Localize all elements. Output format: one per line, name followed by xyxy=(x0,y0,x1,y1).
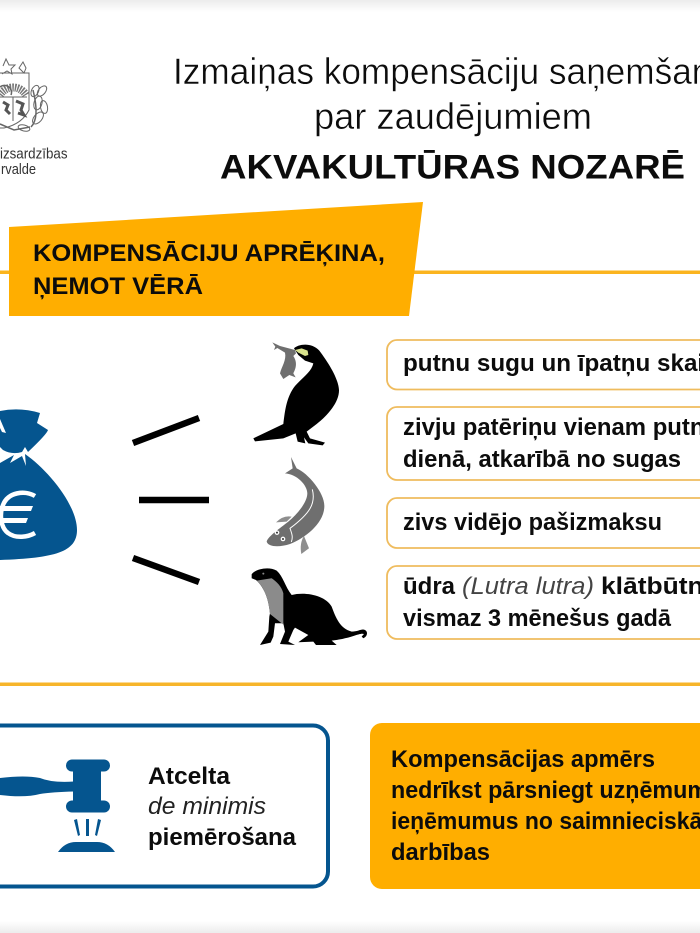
section rule: upper xyxy=(0,270,700,274)
panel: de minimis xyxy=(0,726,328,886)
panel: de minimis: piemērošana xyxy=(148,824,297,851)
list item: bird count xyxy=(387,340,700,390)
title: AKVAKULTŪRAS NOZARĒ xyxy=(220,148,685,186)
icon: money bag with euro sign xyxy=(0,409,77,560)
panel: de minimis: Atcelta xyxy=(148,763,231,790)
logo: coat of arms with organisation name xyxy=(0,59,68,178)
panel: compensation limit callout: Kompensācijas apmērs xyxy=(391,746,655,773)
list item: average fish cost: zivs vidējo pašizmaksu xyxy=(403,509,662,536)
list item: otter presence: ūdra xyxy=(403,573,455,600)
connector lines xyxy=(133,418,209,582)
list item: otter presence: vismaz 3 mēnešus gadā xyxy=(403,605,671,632)
title xyxy=(173,51,700,186)
list item: otter presence xyxy=(387,566,700,639)
section banner xyxy=(9,202,423,316)
icon: gavel xyxy=(0,760,115,852)
list item: fish consumption: dienā, atkarībā no sugas xyxy=(403,446,681,473)
list item: otter presence: (Lutra lutra) xyxy=(462,573,594,600)
icon: cormorant holding fish xyxy=(253,342,339,445)
section banner: ŅEMOT VĒRĀ xyxy=(33,273,203,300)
logo: coat of arms with organisation name: izsardzības xyxy=(0,146,68,162)
panel: compensation limit callout xyxy=(370,723,700,889)
list item: average fish cost xyxy=(387,498,700,548)
list item: fish consumption xyxy=(387,407,700,480)
title: par zaudējumiem xyxy=(314,96,592,137)
section rule: lower xyxy=(0,682,700,686)
panel: compensation limit callout: darbības xyxy=(391,839,490,866)
icon: fish xyxy=(267,457,324,554)
icon: otter xyxy=(252,568,367,645)
panel: de minimis: de minimis xyxy=(148,793,266,820)
logo: coat of arms with organisation name: rvalde xyxy=(1,161,36,178)
section banner: KOMPENSĀCIJU APRĒĶINA, xyxy=(33,240,385,267)
